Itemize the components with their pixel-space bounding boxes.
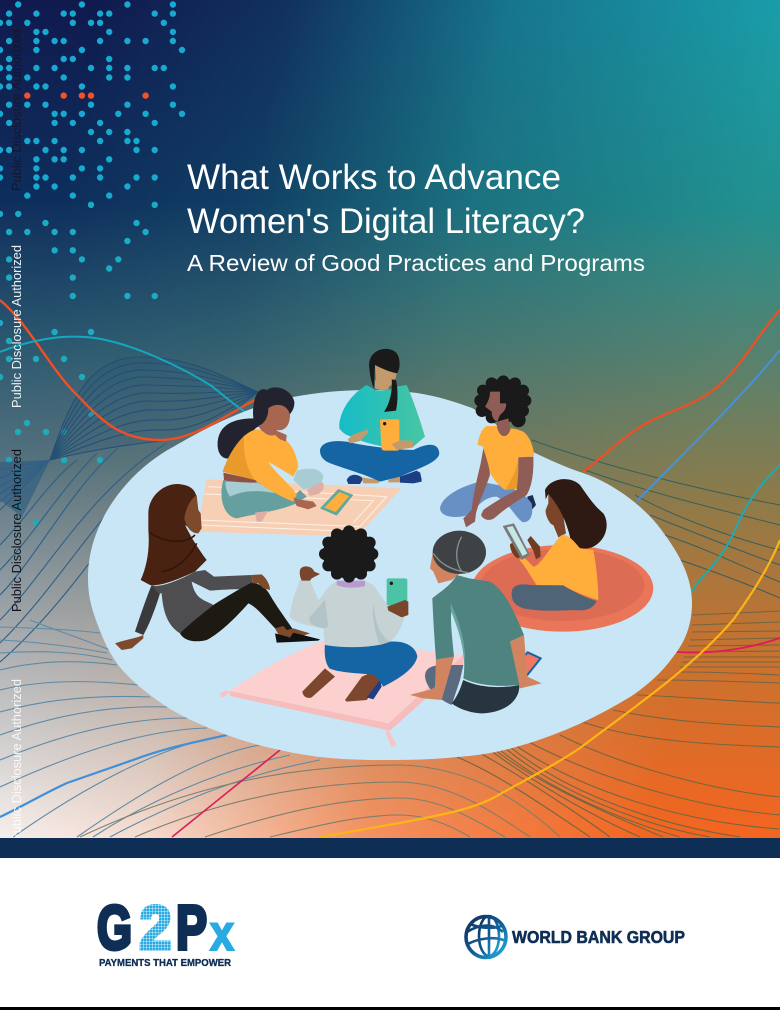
woman with tablet on cushion <box>503 479 607 611</box>
logo: G2Px <box>97 894 234 969</box>
tablet on rug <box>320 489 353 516</box>
title: Women's Digital Literacy? <box>187 202 585 241</box>
vertical watermark text 4: Public Disclosure Authorized <box>10 679 24 842</box>
dot pattern: digital data grid <box>0 4 182 523</box>
logo: G2Px: 2 <box>139 894 172 963</box>
title: What Works to Advance <box>187 158 561 197</box>
light blue floor blob <box>88 390 692 760</box>
wave line field: bottom centre curves <box>80 765 560 837</box>
woman with dark hair and orange sweater <box>218 387 324 522</box>
red-orange wave line, right <box>583 310 780 472</box>
pink mat <box>220 640 463 747</box>
logo: G2Px: G <box>97 894 132 963</box>
round red floor cushion <box>472 545 653 632</box>
red-orange wave line, left <box>0 300 255 440</box>
vertical watermark text 3: Public Disclosure Authorized <box>10 449 24 612</box>
peach rug <box>197 479 402 537</box>
wave line field: lower-right curves <box>457 611 780 837</box>
white footer <box>0 858 780 1007</box>
wave line field: left fan <box>0 443 167 662</box>
wave line field: upper-right curves <box>532 440 780 598</box>
teal wave line, right <box>692 465 780 592</box>
woman with ponytail in teal top <box>320 349 439 484</box>
vertical watermark text 1: Public Disclosure Authorized <box>10 29 24 191</box>
teal wave line, left <box>0 337 245 412</box>
illustration: group of women <box>115 349 653 747</box>
wave line field: upper-left lobe <box>50 357 258 460</box>
woman in hijab sitting <box>115 484 320 650</box>
black bottom rule <box>0 1007 780 1010</box>
woman with afro, kneeling, holding phone <box>290 525 417 702</box>
logo: G2Px: PAYMENTS THAT EMPOWER <box>99 957 231 969</box>
title <box>187 158 585 241</box>
woman with afro in orange tee <box>440 375 536 527</box>
logo: World Bank Group <box>466 916 685 958</box>
crimson wave line, right <box>677 638 780 652</box>
yellow wave line <box>320 540 780 837</box>
logo: G2Px: P <box>176 894 207 963</box>
woman in grey head wrap from behind <box>410 531 542 713</box>
vertical watermark text 2: Public Disclosure Authorized <box>10 245 24 408</box>
subtitle: A Review of Good Practices and Programs <box>187 250 645 276</box>
blue wave line, lower left <box>0 735 227 817</box>
logo: World Bank Group: WORLD BANK GROUP <box>512 927 685 947</box>
logo: G2Px: x <box>210 905 234 961</box>
dark navy band <box>0 838 780 858</box>
wave line field: lower-left curves <box>0 620 320 837</box>
blue wave line, right <box>637 350 780 501</box>
crimson wave line, lower left <box>172 750 280 837</box>
